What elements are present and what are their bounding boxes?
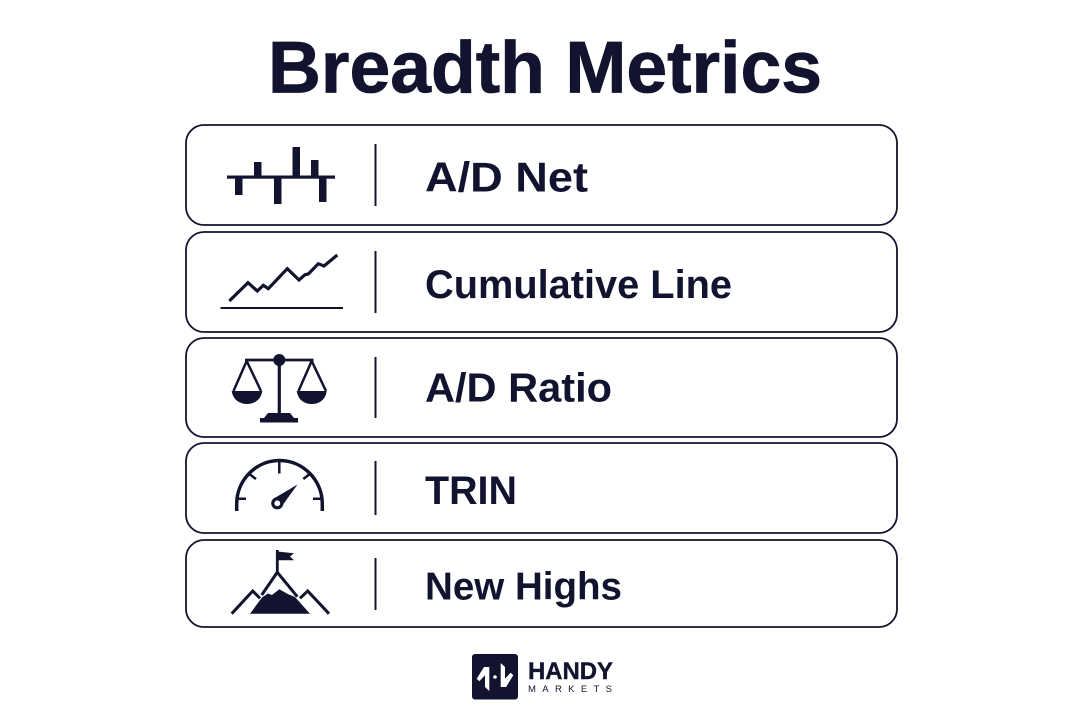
- icon: gauge: [237, 460, 322, 511]
- label: A/D Ratio: A/D Ratio: [425, 365, 612, 411]
- icon: net bars: [227, 147, 335, 204]
- panel: A/D Ratio: [186, 338, 897, 437]
- panel: A/D Net: [186, 125, 897, 225]
- icon: balance scale: [232, 354, 327, 422]
- logo: Handy Markets: [472, 654, 613, 700]
- label: New Highs: New Highs: [425, 566, 622, 608]
- label: Cumulative Line: Cumulative Line: [425, 263, 732, 307]
- panel: TRIN: [186, 443, 897, 533]
- label: TRIN: TRIN: [425, 469, 517, 513]
- panel: Cumulative Line: [186, 232, 897, 332]
- wordmark: MARKETS: MARKETS: [528, 684, 612, 695]
- icon: mountain with flag: [232, 550, 329, 614]
- title: Breadth Metrics: [268, 26, 822, 109]
- label: A/D Net: A/D Net: [425, 153, 588, 200]
- panel: New Highs: [186, 540, 897, 627]
- icon: logo mark: [472, 654, 518, 700]
- icon: rising line chart: [220, 255, 343, 308]
- wordmark: HANDY: HANDY: [528, 658, 613, 685]
